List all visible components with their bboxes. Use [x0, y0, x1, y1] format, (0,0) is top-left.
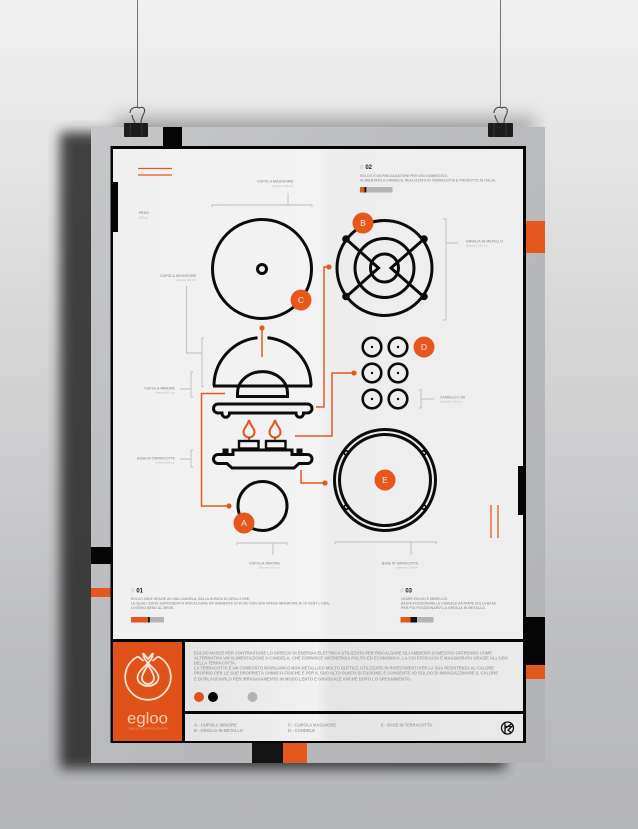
- weight note: 100 kg: [139, 216, 148, 220]
- legend column 1: [194, 722, 243, 733]
- annotation: grid diameter: diametro 100 cm: [466, 244, 488, 248]
- part A: small dome top view: [238, 482, 287, 530]
- orange leader: candles: [295, 370, 357, 436]
- annotation: base diameter: [335, 542, 436, 570]
- annotation: candles: diametro 100 cm: [440, 400, 462, 404]
- legend column 1: B - GRIGLIA IN METALLO: [194, 728, 243, 733]
- decorative orange double bars top: [138, 168, 172, 175]
- section 03: PER POI POSIZIONARVI LA GRIGLIA IN METALLO.: [401, 606, 486, 610]
- annotation: grid diameter: GRIGLIA IN METALLO: [466, 240, 503, 244]
- weight note: [139, 211, 149, 220]
- description text: [194, 651, 508, 681]
- annotation: base height: altezza 100 cm: [156, 460, 176, 464]
- part B: metal grid top view: [337, 220, 432, 316]
- section 02: EGLOO È UN RISCALDATORE PER USO DOMESTICO,: [360, 173, 448, 178]
- annotation: base diameter: BASE IN TERRACOTTA: [382, 562, 418, 566]
- description text: EGLOO NASCE PER CONTRASTARE LO SPRECO DI ENERGIA ELETTRICA UTILIZZATA PER RISCALDARE GLI AMBIENTI DOMESTICI OFFRENDO COME: [194, 651, 492, 656]
- badge D: [414, 336, 434, 358]
- description text: ALTERNATIVA UN'ALIMENTAZIONE A CANDELA, CHE FORNISCE UN'ENERGIA PULITA ED ECONOMICA. LA CUI EFFICACIA È MAGGIORATA GRAZIE ALL'USO: [194, 654, 508, 661]
- annotation: large dome height: altezza 100 cm: [177, 278, 197, 282]
- section 02: ALIMENTATO A CANDELE, REALIZZATO IN TERRACOTTA E PRODOTTO IN ITALIA.: [360, 178, 496, 182]
- orange leader: dome to top view: [259, 325, 265, 357]
- annotation: large dome diameter: diametro 100 cm: [271, 184, 294, 188]
- part C: large dome top view: [212, 220, 312, 318]
- badge E: E: [382, 475, 388, 485]
- annotation: candles: [419, 390, 465, 408]
- section 01: LE QUALI SONO SUFFICIENTI A RISCALDARE UN AMBIENTE DI 30 M2 CON UNA SPESA INFERIORE AI 10 CENT L'ORA,: [131, 602, 330, 606]
- weight note: PESO: [139, 211, 149, 215]
- badge D: D: [421, 342, 427, 352]
- annotation: large dome diameter: [212, 180, 312, 207]
- description text: LA TERRACOTTA È UN COMPOSTO INORGANICO NON METALLICO MOLTO DUTTILE, UTILIZZATO IN RIVESTIMENTI PER LA SUA RESISTENZA AL CALORE: [194, 664, 494, 671]
- border colour blocks: [91, 127, 545, 763]
- logo emblem: [125, 653, 171, 700]
- poster sheet: [91, 127, 545, 763]
- annotation: grid diameter: [443, 219, 503, 320]
- binder clip right: [488, 107, 513, 137]
- legend column 2: [288, 722, 336, 733]
- annotation: candles: CANDELE 6 UNI: [440, 396, 465, 400]
- section 02: // 02: [360, 165, 373, 171]
- badge C: [290, 290, 312, 310]
- frame inner tabs: [113, 182, 523, 515]
- terracotta base side view: [214, 450, 312, 468]
- legend column 1: A - CUPOLA MINORE: [194, 722, 237, 728]
- main paper panel: [113, 149, 523, 639]
- annotation: large dome height: [160, 274, 204, 386]
- small dome side view: [238, 372, 288, 396]
- colour swatches: [194, 692, 258, 702]
- legend column 2: D - CANDELE: [288, 728, 315, 733]
- hanging wires: [138, 0, 500, 108]
- section 01: EGLOO ARDE GRAZIE AD UNA CANDELA, DALLA DURATA DI CIRCA 3 ORE,: [131, 597, 250, 601]
- annotation: small dome diameter: diametro 100 cm: [258, 566, 281, 570]
- annotation: small dome height: altezza 100 cm: [156, 390, 176, 394]
- section 03: // 03: [400, 588, 413, 594]
- badge B: [352, 212, 374, 234]
- badge E: [374, 470, 396, 490]
- part E: terracotta base top view: [334, 430, 436, 530]
- badge A: A: [241, 518, 247, 528]
- annotation: small dome height: CUPOLA MINORE: [144, 386, 176, 390]
- section 03: BASTA POSIZIONARE LE CANDELE DA PARTE SULLA BASE: [401, 602, 497, 606]
- annotation: small dome diameter: [237, 543, 287, 570]
- poster shadow: [60, 116, 535, 769]
- section 03: USARE EGLOO È SEMPLICE:: [401, 596, 448, 601]
- annotation: base diameter: diametro 100 cm: [396, 566, 419, 570]
- section 01: // 01: [131, 588, 144, 594]
- orange leader: small dome: [202, 394, 232, 509]
- description text: E DI RILASCIARLO PER IRRAGGIAMENTO IN MODO LENTO E GRADUALE ANCHE DOPO LO SPEGNIMENTO.: [194, 676, 411, 681]
- decorative orange double bars right: [491, 505, 498, 538]
- annotation: large dome height: CUPOLA MAGGIORE: [160, 274, 197, 278]
- candles side view: [239, 438, 286, 448]
- section 01: [131, 588, 330, 622]
- orange leader: plate to grid: [316, 264, 332, 407]
- section 02: [360, 165, 496, 192]
- annotation: small dome diameter: CUPOLA MINORE: [249, 562, 281, 566]
- logo tagline: CANDLE POWERED HEATER: [128, 726, 168, 730]
- annotation: small dome height: [144, 372, 193, 397]
- legend column 3: E - BASE IN TERRACOTTA: [381, 722, 433, 728]
- description text: DELLA TERRACOTTA.: [194, 661, 236, 666]
- annotation: base height: BASE IN TERRACOTTA: [137, 456, 175, 460]
- grid side view plate: [214, 404, 312, 417]
- icon: author mark: [502, 722, 514, 734]
- badge B: B: [360, 218, 366, 228]
- binder clip left: [124, 107, 148, 137]
- badge C: C: [298, 295, 304, 305]
- section 03: [400, 588, 497, 622]
- large dome side view: [213, 338, 312, 386]
- description text: PROPRIO PER LE SUE PROPRIETÀ CHIMICO-FISICHE E PER IL SUO ALTO PUNTO DI FUSIONE, E CONSENTE AD EGLOO DI IMMAGAZZINARE IL CALORE: [194, 670, 498, 676]
- badge A: [234, 512, 254, 534]
- logo panel: [113, 642, 182, 741]
- part D: six candles: [363, 338, 407, 408]
- annotation: large dome diameter: CUPOLA MAGGIORE: [257, 180, 294, 184]
- legend panel: [185, 714, 523, 741]
- black frame: [110, 146, 526, 743]
- orange leader: base: [301, 470, 328, 486]
- logo wordmark: egloo: [127, 710, 168, 728]
- candle flames: [244, 420, 280, 438]
- description panel: [185, 642, 523, 711]
- annotation: base height: [137, 450, 193, 467]
- section 01: OVVERO MENO AL MESE.: [131, 606, 174, 610]
- legend column 2: C - CUPOLA MAGGIORE: [288, 722, 336, 728]
